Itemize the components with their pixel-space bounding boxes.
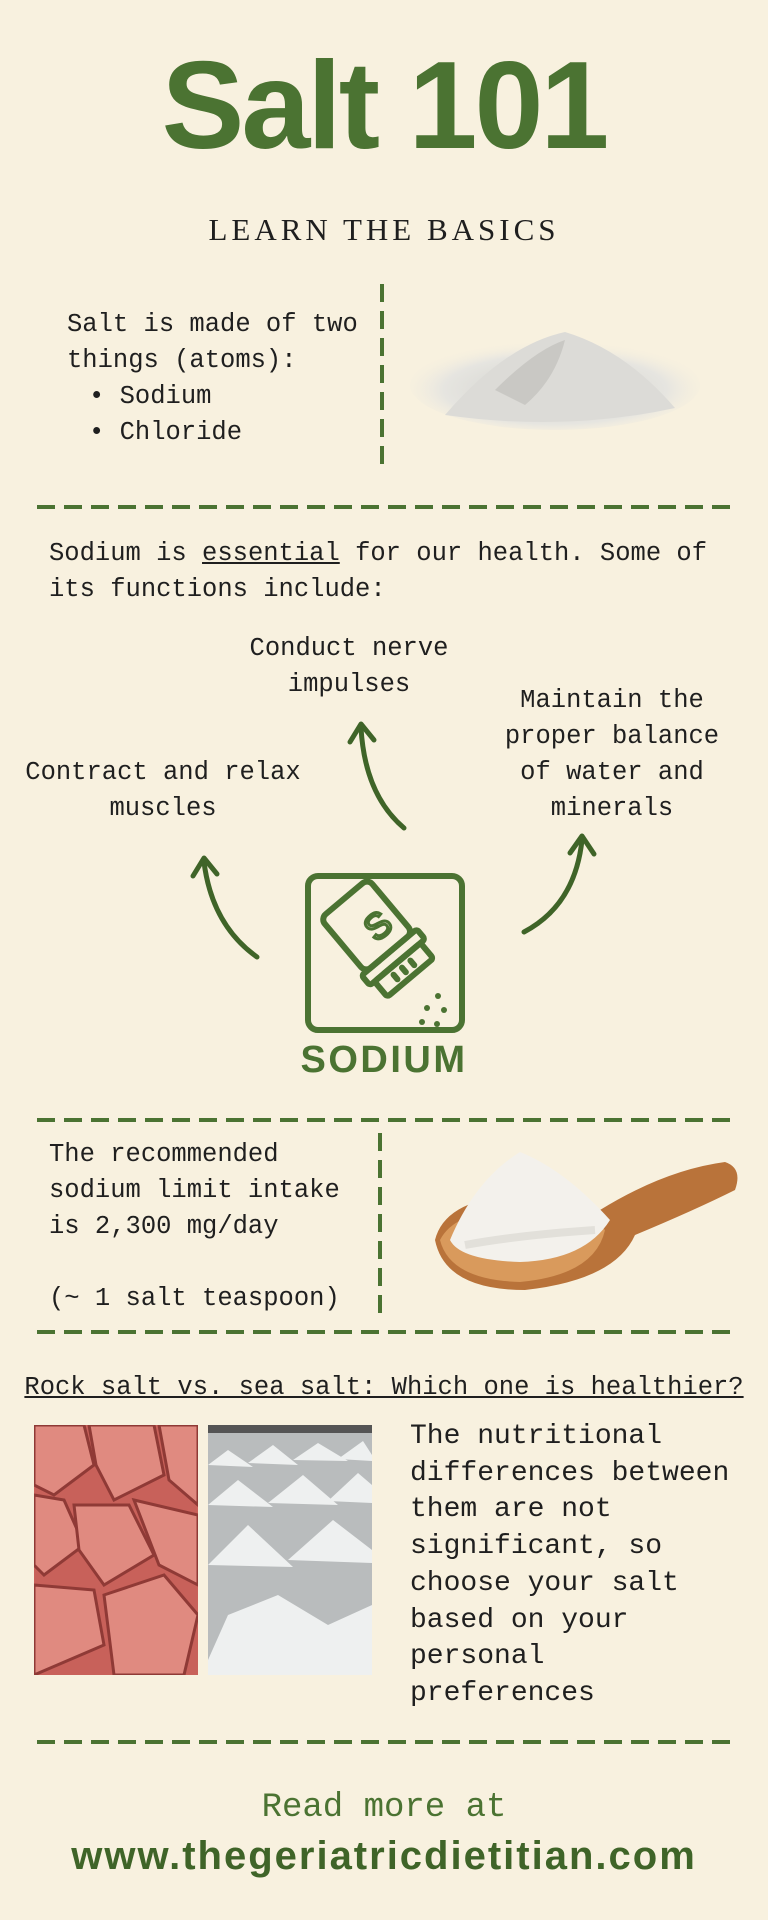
image: salt pile xyxy=(428,332,682,429)
function: conduct nerve impulses: impulses xyxy=(288,670,410,699)
text: recommended limit: is 2,300 mg/day xyxy=(49,1212,279,1241)
text block: salt composition: • Chloride xyxy=(89,418,242,447)
function: maintain balance: Maintain the xyxy=(520,686,704,715)
footer: url: www.thegeriatricdietitian.com xyxy=(71,1834,697,1878)
text: nutritional differences xyxy=(410,1421,729,1709)
icon: salt shaker: S xyxy=(355,902,400,949)
image: sea salt xyxy=(208,1425,372,1675)
function: conduct nerve impulses: Conduct nerve xyxy=(250,634,448,663)
function: maintain balance: of water and xyxy=(520,758,704,787)
text: sodium essential: Sodium is essential for our health. Some of xyxy=(49,539,707,568)
label: SODIUM: SODIUM xyxy=(300,1039,468,1081)
arrow: to balance xyxy=(524,836,594,932)
text: sodium essential: its functions include: xyxy=(49,575,386,604)
text: nutritional differences: significant, so xyxy=(410,1531,662,1562)
arrow: to nerve xyxy=(350,724,404,828)
text block: salt composition: Salt is made of two xyxy=(67,310,358,339)
text: nutritional differences: differences between xyxy=(410,1458,729,1489)
title: Salt 101 xyxy=(162,37,606,175)
function: maintain balance xyxy=(505,686,719,823)
image: salt in wooden spoon xyxy=(435,1152,738,1290)
subtitle: LEARN THE BASICS xyxy=(208,212,560,247)
text: nutritional differences: preferences xyxy=(410,1678,595,1709)
text: recommended limit: (~ 1 salt teaspoon) xyxy=(49,1284,340,1313)
text: nutritional differences: them are not xyxy=(410,1494,612,1525)
image: rock salt xyxy=(34,1425,198,1675)
heading: rock vs sea salt: Rock salt vs. sea salt: Which one is healthier? xyxy=(24,1373,744,1402)
function: conduct nerve impulses xyxy=(250,634,448,699)
function: maintain balance: proper balance xyxy=(505,722,719,751)
text block: salt composition: things (atoms): xyxy=(67,346,297,375)
icon: salt shaker xyxy=(305,873,465,1033)
function: maintain balance: minerals xyxy=(551,794,673,823)
text: nutritional differences: based on your xyxy=(410,1605,628,1636)
text: recommended limit: sodium limit intake xyxy=(49,1176,340,1205)
text: nutritional differences: personal xyxy=(410,1641,544,1672)
arrow: to muscles xyxy=(193,858,257,957)
function: contract muscles: muscles xyxy=(109,794,217,823)
text: recommended limit xyxy=(49,1140,340,1313)
footer: read more: Read more at xyxy=(262,1789,506,1827)
text: sodium essential xyxy=(49,539,707,604)
text block: salt composition xyxy=(67,310,358,447)
function: contract muscles xyxy=(25,758,301,823)
text: nutritional differences: choose your salt xyxy=(410,1568,679,1599)
text: recommended limit: The recommended xyxy=(49,1140,279,1169)
function: contract muscles: Contract and relax xyxy=(25,758,301,787)
text: nutritional differences: The nutritional xyxy=(410,1421,662,1452)
text block: salt composition: • Sodium xyxy=(89,382,211,411)
